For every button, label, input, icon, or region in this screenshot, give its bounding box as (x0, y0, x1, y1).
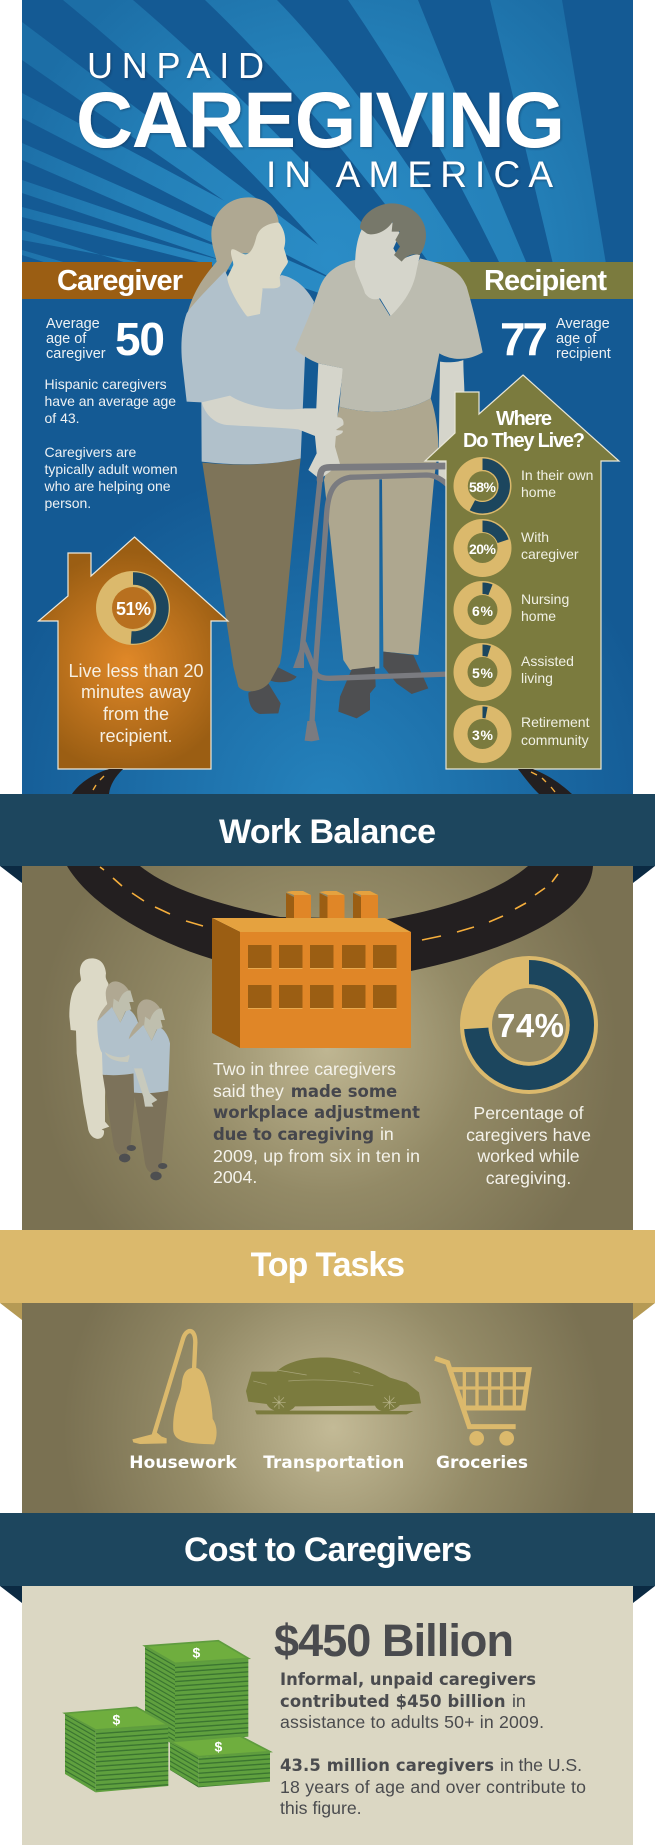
donut 6 percent (454, 581, 512, 639)
back silhouette (69, 958, 109, 1139)
task labels (129, 1452, 528, 1473)
recipient pants (324, 398, 438, 670)
band: recipient (420, 262, 633, 299)
donut 20 percent: 20% (469, 541, 497, 557)
house heading: Where (496, 408, 552, 430)
recipient shirt (295, 258, 483, 412)
recipient face and neck (355, 222, 420, 316)
label: nursing home (521, 591, 569, 624)
caregiver shoes (248, 665, 297, 714)
task labels: Housework (129, 1453, 237, 1473)
back stack (145, 1641, 248, 1743)
label: assisted living: Assisted (521, 653, 574, 669)
donut 20 percent (454, 519, 512, 577)
label: in their own home (521, 467, 593, 500)
title: IN AMERICA (266, 154, 553, 195)
percentage caption: Percentage of (473, 1103, 584, 1123)
donut 5 percent (454, 643, 512, 701)
recipient arm holding walker (308, 363, 343, 479)
band: caregiver (22, 262, 212, 299)
donut 3 percent (454, 705, 512, 763)
back stack: $ (192, 1644, 200, 1660)
donut 3 percent: 3% (472, 727, 494, 743)
label: assisted living: living (521, 670, 553, 686)
label: with caregiver: caregiver (521, 546, 579, 562)
road (67, 866, 593, 971)
recipient average age: recipient (556, 346, 611, 362)
percentage caption (466, 1103, 591, 1188)
label: nursing home: Nursing (521, 591, 569, 607)
banner: work balance: Work Balance (219, 813, 436, 851)
donut 51 percent: 51% (116, 599, 151, 619)
donut 5 percent: 5% (472, 665, 494, 681)
middle person (97, 981, 139, 1162)
house text (68, 661, 204, 746)
left house callout (38, 537, 228, 769)
label: assisted living (521, 653, 574, 686)
house text: Live less than 20 (68, 661, 204, 681)
caregiver average age (46, 313, 165, 365)
icon: factory (212, 891, 411, 1048)
cost text: 43.5 million caregivers (280, 1756, 494, 1775)
caregiver facts: Hispanic caregivers (44, 376, 167, 392)
work adjustment text: in (380, 1124, 394, 1144)
house text: minutes away (81, 682, 191, 702)
caregiver facts: who are helping one (44, 478, 171, 494)
label: nursing home: home (521, 608, 556, 624)
panel: blue hero background (22, 0, 633, 794)
banner: top tasks (0, 1230, 655, 1320)
illustration: caregiver and recipient with walker (181, 197, 483, 741)
caregiver facts (44, 376, 178, 511)
caregiver facts: typically adult women (44, 461, 178, 477)
front person (129, 999, 170, 1180)
caregiver shirt (181, 271, 314, 464)
caregiver arm (202, 396, 344, 437)
banner: top tasks: Top Tasks (251, 1246, 405, 1284)
recipient hair (360, 203, 426, 262)
panel: cost to caregivers (22, 1586, 633, 1845)
icon: vacuum (132, 1331, 217, 1444)
left stack (65, 1707, 168, 1792)
work adjustment text: workplace adjustment (213, 1103, 420, 1122)
icon: stacks of money (65, 1641, 270, 1792)
cost text: in the U.S. (500, 1755, 582, 1775)
caregiver facts: Caregivers are (44, 444, 137, 460)
recipient shoes (338, 652, 428, 718)
house heading: Do They Live? (463, 430, 585, 452)
caregiver facts: person. (44, 495, 91, 511)
caregiver pants (202, 458, 301, 691)
cost text: Informal, unpaid caregivers (280, 1670, 536, 1689)
front stack (170, 1736, 270, 1787)
donut 58 percent (454, 457, 512, 515)
panel: top tasks (22, 1303, 633, 1513)
donut 58 percent: 58% (469, 479, 497, 495)
caregiver facts: of 43. (44, 410, 80, 426)
label: in their own home: In their own (521, 467, 593, 483)
caregiver average age: Average (46, 316, 100, 332)
recipient heading: Recipient (484, 265, 607, 297)
recipient right arm (438, 360, 465, 480)
cost text: this figure. (280, 1798, 362, 1818)
label: retirement community: community (521, 732, 589, 748)
label: with caregiver (521, 529, 579, 562)
caregiver heading: Caregiver (57, 265, 183, 297)
title: CAREGIVING (76, 75, 565, 164)
work adjustment text: Two in three caregivers (213, 1059, 396, 1079)
caregiver average age: age of (46, 331, 87, 347)
label: retirement community: Retirement (521, 714, 590, 730)
work adjustment text (213, 1059, 420, 1187)
donut 74 percent: 74% (497, 1007, 564, 1044)
work adjustment text: 2004. (213, 1167, 257, 1187)
label: retirement community (521, 714, 590, 748)
cost text: assistance to adults 50+ in 2009. (280, 1712, 544, 1732)
banner: cost to caregivers (0, 1513, 655, 1603)
caregiver facts: have an average age (44, 393, 176, 409)
factory windows (248, 945, 396, 1008)
donut 51 percent (96, 571, 170, 645)
cost text: 18 years of age and over contribute to (280, 1777, 586, 1797)
right house: where do they live (425, 375, 619, 769)
road stubs above banner (72, 769, 572, 794)
front stack: $ (214, 1738, 222, 1754)
chimneys (286, 891, 378, 928)
label: in their own home: home (521, 484, 556, 500)
recipient average age: Average (556, 316, 610, 332)
banner: work balance (0, 794, 655, 883)
work adjustment text: due to caregiving (213, 1125, 374, 1144)
left stack: $ (112, 1711, 120, 1727)
cost figure: $450 Billion (274, 1615, 514, 1666)
walker frame (294, 466, 450, 741)
caregiver face and neck (227, 222, 288, 317)
work adjustment text: made some (291, 1082, 397, 1101)
icon: group of caregivers (69, 958, 170, 1180)
work adjustment text: 2009, up from six in ten in (213, 1146, 420, 1166)
percentage caption: caregivers have (466, 1125, 591, 1145)
label: with caregiver: With (521, 529, 549, 545)
caregiver average age: 50 (115, 313, 165, 365)
sunburst rays (22, 0, 606, 300)
task labels: Transportation (263, 1452, 404, 1472)
icon: car (246, 1358, 421, 1414)
recipient average age: age of (556, 331, 597, 347)
work adjustment text: said they (213, 1081, 284, 1101)
percentage caption: worked while (476, 1146, 580, 1166)
house text: recipient. (99, 726, 173, 746)
percentage caption: caregiving. (486, 1168, 571, 1188)
icon: shopping cart (435, 1358, 529, 1446)
cost text (280, 1670, 586, 1818)
panel: work balance (22, 866, 633, 1230)
title (76, 45, 565, 195)
house text: from the (103, 704, 169, 724)
house heading (463, 408, 585, 452)
recipient average age: 77 (500, 313, 548, 365)
task labels: Groceries (436, 1453, 528, 1473)
cost text: contributed $450 billion (280, 1692, 506, 1711)
title: UNPAID (87, 45, 264, 86)
banner: cost to caregivers: Cost to Caregivers (184, 1531, 472, 1569)
donut 6 percent: 6% (472, 603, 494, 619)
caregiver hair (187, 197, 279, 314)
cost text: in (512, 1691, 526, 1711)
donut 74 percent (460, 956, 598, 1094)
recipient average age (500, 313, 611, 365)
caregiver average age: caregiver (46, 346, 106, 362)
